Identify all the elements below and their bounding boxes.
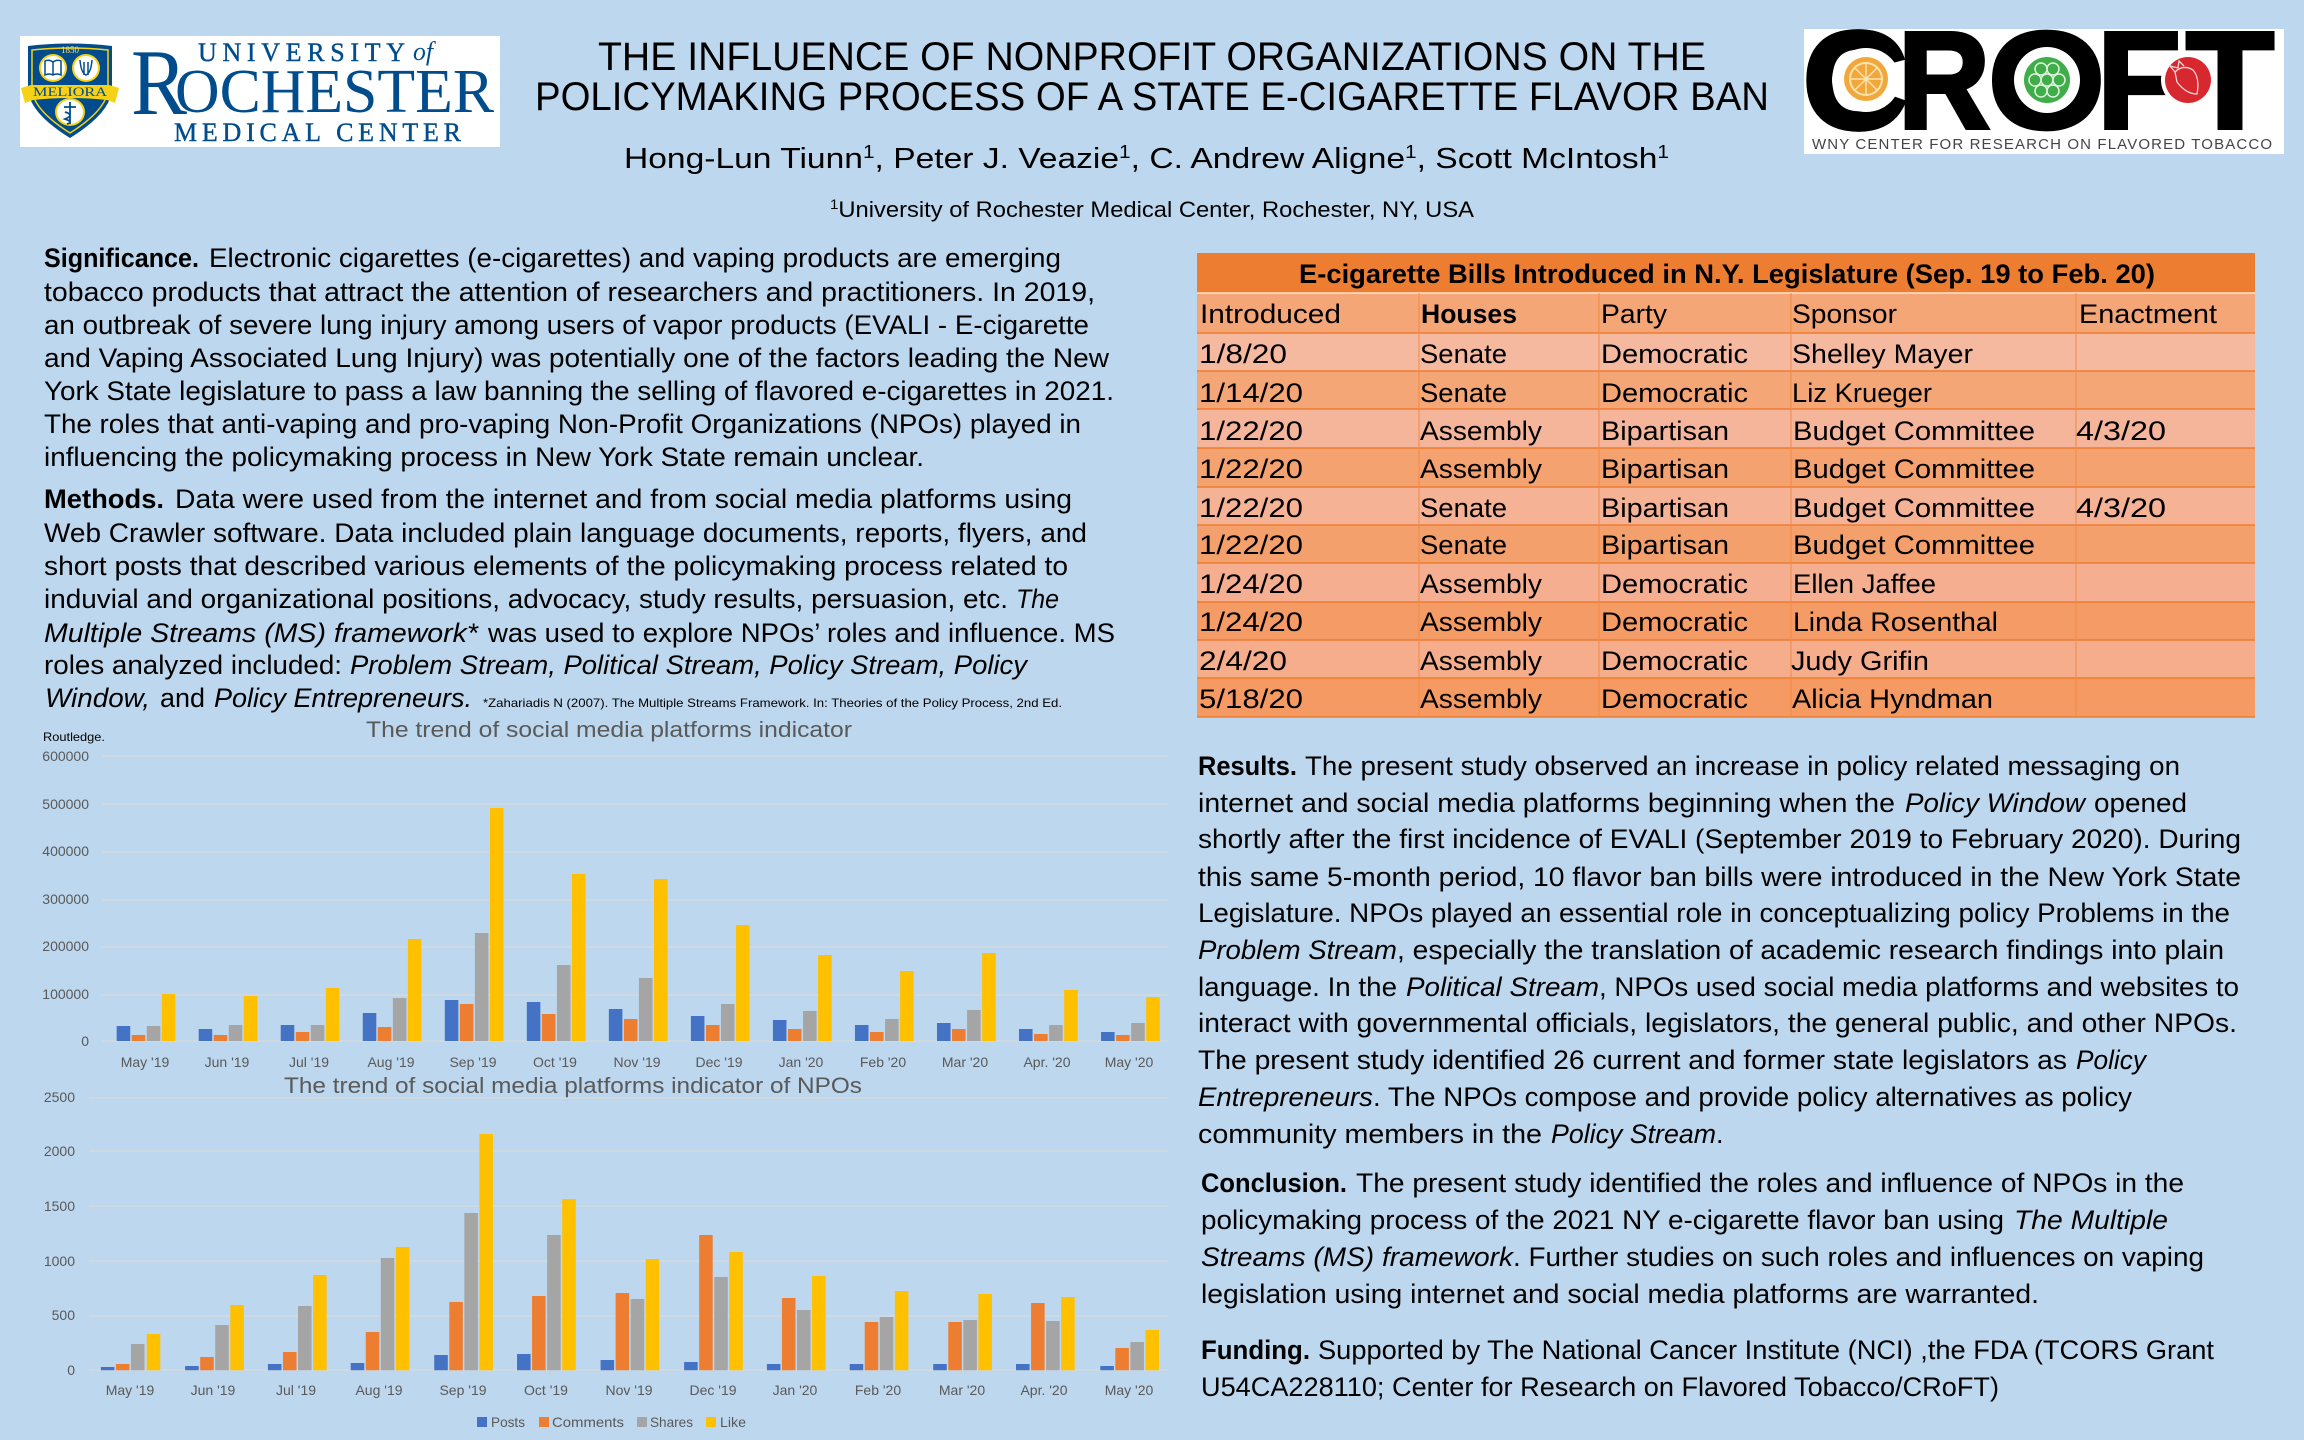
table header band	[1197, 253, 2255, 293]
authors: , Scott McIntosh	[1417, 143, 1657, 175]
table rows: Budget Committee	[1793, 416, 2035, 446]
text block: results: Entrepreneurs	[1198, 1082, 1373, 1112]
table rows: Democratic	[1601, 569, 1748, 599]
bars	[101, 1134, 1159, 1370]
icon: green grapes	[2014, 47, 2080, 113]
text block: conclusion: legislation using internet and social media platforms are warranted.	[1201, 1279, 2039, 1309]
y axis labels	[42, 748, 89, 1049]
x axis labels: Jul '19	[289, 1054, 329, 1070]
text block: funding: U54CA228110; Center for Research on Flavored Tobacco/CRoFT)	[1201, 1372, 1999, 1402]
text block: significance: Significance.	[44, 243, 199, 273]
text block: methods: Data were used from the internet and from social media platforms using	[175, 484, 1072, 514]
text block: conclusion: policymaking process of the 2021 NY e-cigarette flavor ban using	[1201, 1205, 2004, 1235]
x axis labels: Mar '20	[939, 1382, 985, 1398]
text block: conclusion: The present study identified the roles and influence of NPOs in the	[1356, 1168, 2184, 1198]
x axis labels: May '20	[1105, 1054, 1154, 1070]
x axis labels: Oct '19	[533, 1054, 577, 1070]
text block: results: internet and social media platforms beginning when the	[1198, 788, 1895, 818]
logo: University of Rochester Medical Center	[20, 31, 500, 147]
table rows: Assembly	[1420, 569, 1543, 599]
table rows: Bipartisan	[1601, 416, 1729, 446]
x axis labels: Jan '20	[779, 1054, 824, 1070]
text block: results: this same 5-month period, 10 flavor ban bills were introduced in the New York State	[1198, 862, 2241, 892]
text block: results: shortly after the first incidence of EVALI (September 2019 to February 2020). During	[1198, 824, 2241, 854]
logo letters: F	[2097, 4, 2181, 158]
text block: results: community members in the	[1198, 1119, 1542, 1149]
text block: results: opened	[2094, 788, 2187, 818]
x axis labels: Feb '20	[860, 1054, 906, 1070]
y axis labels: 1500	[44, 1198, 75, 1214]
authors: 1	[1657, 142, 1669, 162]
x axis labels: May '19	[106, 1382, 154, 1398]
logo letters: C	[1803, 4, 1907, 158]
table rows: Democratic	[1601, 339, 1748, 369]
column headers	[1200, 299, 2218, 329]
table rows: Assembly	[1420, 684, 1543, 714]
x axis labels: Apr. '20	[1020, 1382, 1068, 1398]
table rows: Senate	[1420, 339, 1507, 369]
text block: results: The present study observed an increase in policy related messaging on	[1305, 751, 2180, 781]
x axis labels	[121, 1054, 1154, 1070]
affiliation: University of Rochester Medical Center, Rochester, NY, USA	[838, 197, 1474, 222]
x axis labels: Oct '19	[524, 1382, 568, 1398]
x axis labels: Nov '19	[613, 1054, 661, 1070]
table rows	[1199, 339, 2166, 714]
footnote reference: *Zahariadis N (2007). The Multiple Streams Framework. In: Theories of the Policy Process, 2nd Ed.	[483, 696, 1062, 710]
authors: 1	[863, 142, 875, 162]
text block: results: Problem Stream	[1198, 935, 1397, 965]
text block: conclusion: Streams (MS) framework	[1201, 1242, 1515, 1272]
table: e-cigarette bills introduced	[1197, 253, 2255, 717]
text block: significance	[44, 243, 1114, 472]
table rows: Alicia Hyndman	[1792, 684, 1993, 714]
chart title: The trend of social media platforms indicator	[366, 717, 852, 742]
table rows: Bipartisan	[1601, 454, 1729, 484]
text block: results: Policy Window	[1905, 788, 2087, 818]
authors: 1	[1405, 142, 1417, 162]
y axis labels: 300000	[42, 891, 89, 907]
legend: Like	[720, 1414, 746, 1430]
table row fills	[1197, 293, 2255, 717]
y axis labels: 200000	[42, 938, 89, 954]
table title: E-cigarette Bills Introduced in N.Y. Legislature (Sep. 19 to Feb. 20)	[1299, 259, 2155, 289]
table rows: Budget Committee	[1793, 493, 2035, 523]
text block: significance: influencing the policymaking process in New York State remain unclear.	[44, 442, 924, 472]
icon: orange slice	[1832, 48, 1900, 112]
table rows: Democratic	[1601, 378, 1748, 408]
text block: conclusion: Conclusion.	[1201, 1168, 1347, 1198]
text block: funding: Funding.	[1201, 1335, 1310, 1365]
text block: results: language. In the	[1198, 972, 1397, 1002]
y axis labels	[44, 1089, 75, 1378]
table rows: Linda Rosenthal	[1793, 607, 1998, 637]
x axis labels: Dec '19	[689, 1382, 737, 1398]
bar chart: trend of social media platforms indicator	[42, 717, 1168, 1070]
legend	[477, 1414, 746, 1430]
logo text: University of: of	[413, 37, 437, 66]
x axis labels: Feb '20	[855, 1382, 901, 1398]
table rows: Budget Committee	[1793, 454, 2035, 484]
table rows: Shelley Mayer	[1792, 339, 1973, 369]
text block: results: Results.	[1198, 751, 1297, 781]
logo letters: O	[1988, 4, 2105, 158]
title	[535, 35, 1769, 119]
table rows: 1/22/20	[1199, 416, 1303, 446]
table rows: Assembly	[1420, 607, 1543, 637]
text block: results: Policy	[2076, 1045, 2147, 1075]
legend: Comments	[552, 1414, 624, 1430]
x axis labels: Aug '19	[367, 1054, 415, 1070]
text block: methods: Methods.	[44, 484, 164, 514]
x axis labels: Jun '19	[191, 1382, 236, 1398]
table rows: 1/24/20	[1199, 607, 1303, 637]
text block: results: The present study identified 26 current and former state legislators as	[1198, 1045, 2067, 1075]
text block: results: Political Stream	[1406, 972, 1599, 1002]
x axis labels: Apr. '20	[1023, 1054, 1071, 1070]
text block: significance: tobacco products that attract the attention of researchers and practitioners. In 2019,	[44, 277, 1095, 307]
legend: Shares	[650, 1414, 693, 1430]
logo text: Rochester: R	[131, 31, 187, 135]
text block: results: .	[1716, 1119, 1724, 1149]
y axis labels: 0	[81, 1033, 89, 1049]
icon: Meliora shield: MELIORA	[33, 84, 108, 99]
table rows: 4/3/20	[2076, 493, 2166, 523]
y axis labels: 2000	[44, 1143, 75, 1159]
table rows: 5/18/20	[1199, 684, 1303, 714]
table rows: Democratic	[1601, 684, 1748, 714]
x axis labels: May '19	[121, 1054, 170, 1070]
table rows: Assembly	[1420, 454, 1543, 484]
table rows: 4/3/20	[2076, 416, 2166, 446]
x axis labels: Nov '19	[605, 1382, 653, 1398]
text block: methods: induvial and organizational positions, advocacy, study results, persuasion, etc.	[44, 584, 1008, 614]
text block: significance: York State legislature to pass a law banning the selling of flavored e-cigarettes in 2021.	[44, 376, 1114, 406]
table rows: 1/22/20	[1199, 530, 1303, 560]
x axis labels: Mar '20	[942, 1054, 988, 1070]
y axis labels: 400000	[42, 843, 89, 859]
text block: significance: Electronic cigarettes (e-cigarettes) and vaping products are emerging	[209, 243, 1061, 273]
icon: red strawberry	[2161, 53, 2215, 107]
y axis labels: 100000	[42, 986, 89, 1002]
text block: significance: an outbreak of severe lung injury among users of vapor products (EVALI - E-cigarette	[44, 310, 1089, 340]
y axis labels: 0	[67, 1362, 75, 1378]
column headers: Enactment	[2079, 299, 2218, 329]
text block: results: . The NPOs compose and provide policy alternatives as policy	[1373, 1082, 2133, 1112]
table rows: 1/14/20	[1199, 378, 1303, 408]
x axis labels: Jun '19	[205, 1054, 250, 1070]
table rows: Assembly	[1420, 416, 1543, 446]
text block: results: , NPOs used social media platforms and websites to	[1599, 972, 2239, 1002]
x axis labels: Jul '19	[276, 1382, 316, 1398]
y axis labels: 500	[52, 1307, 75, 1323]
table rows: Ellen Jaffee	[1793, 569, 1936, 599]
table rows: Senate	[1420, 378, 1507, 408]
logo text: Medical Center: MEDICAL CENTER	[174, 118, 462, 147]
text block: methods: Problem Stream, Political Stream, Policy Stream, Policy	[350, 650, 1029, 680]
table rows: Judy Grifin	[1791, 646, 1929, 676]
logo: CRoFT	[1803, 4, 2284, 158]
table rows: Bipartisan	[1601, 530, 1729, 560]
y axis labels: 500000	[42, 796, 89, 812]
authors: , Peter J. Veazie	[875, 143, 1119, 175]
table rows: Budget Committee	[1793, 530, 2035, 560]
column headers: Sponsor	[1792, 299, 1897, 329]
text block: funding	[1201, 1335, 2214, 1402]
text block: methods: Window,	[45, 683, 150, 713]
logo letters: T	[2186, 4, 2274, 158]
text block: conclusion	[1201, 1168, 2204, 1309]
logo text: University of: UNIVERSITY	[198, 38, 405, 67]
text block: methods: Policy Entrepreneurs.	[214, 683, 472, 713]
y axis labels: 1000	[44, 1253, 75, 1269]
text block: methods: Web Crawler software. Data included plain language documents, reports, flyers, and	[44, 518, 1087, 548]
text block: methods: and	[160, 683, 205, 713]
column headers: Introduced	[1200, 299, 1341, 329]
x axis labels: Jan '20	[773, 1382, 818, 1398]
logo text: Rochester	[131, 31, 495, 135]
text block: funding: Supported by The National Cancer Institute (NCI) ,the FDA (TCORS Grant	[1318, 1335, 2214, 1365]
logo letters: R	[1898, 4, 1990, 158]
bar chart: trend of social media platforms indicator of NPOs	[44, 1073, 1168, 1430]
logo tagline: WNY CENTER FOR RESEARCH ON FLAVORED TOBACCO	[1812, 136, 2272, 153]
logo text: Rochester: OCHESTER	[175, 58, 495, 126]
x axis labels: Sep '19	[449, 1054, 497, 1070]
text block: methods: was used to explore NPOs’ roles and influence. MS	[487, 618, 1115, 648]
x axis labels	[106, 1382, 1154, 1398]
table rows: Bipartisan	[1601, 493, 1729, 523]
table rows: 2/4/20	[1199, 646, 1287, 676]
table rows: 1/22/20	[1199, 454, 1303, 484]
y axis labels: 2500	[44, 1089, 75, 1105]
table rows: 1/24/20	[1199, 569, 1303, 599]
authors: Hong-Lun Tiunn	[624, 143, 830, 175]
text block: significance: and Vaping Associated Lung Injury) was potentially one of the factors leading the New	[44, 343, 1110, 373]
text block: conclusion: . Further studies on such roles and influences on vaping	[1513, 1242, 2204, 1272]
icon: Meliora shield	[21, 44, 119, 138]
text block: conclusion: The Multiple	[2014, 1205, 2168, 1235]
authors: 1	[1119, 142, 1131, 162]
x axis labels: Aug '19	[355, 1382, 403, 1398]
title: POLICYMAKING PROCESS OF A STATE E-CIGARETTE FLAVOR BAN	[535, 75, 1769, 119]
table rows: Democratic	[1601, 607, 1748, 637]
footnote reference: Routledge.	[43, 730, 105, 744]
table rows: 1/8/20	[1199, 339, 1287, 369]
text block: results: interact with governmental officials, legislators, the general public, and other NPOs.	[1198, 1008, 2237, 1038]
text block: significance: The roles that anti-vaping and pro-vaping Non-Profit Organizations (NPOs) played in	[44, 409, 1081, 439]
table rows: Democratic	[1601, 646, 1748, 676]
affiliation: 1	[830, 196, 839, 212]
logo letters	[1803, 4, 2274, 158]
text block: methods	[44, 484, 1115, 713]
text block: results: , especially the translation of academic research findings into plain	[1397, 935, 2224, 965]
x axis labels: May '20	[1105, 1382, 1154, 1398]
table rows: Assembly	[1420, 646, 1543, 676]
column headers: Houses	[1421, 299, 1517, 329]
footnote reference	[43, 696, 1062, 744]
table rows: Liz Krueger	[1792, 378, 1932, 408]
text block: methods: roles analyzed included:	[44, 650, 342, 680]
text block: methods: The	[1016, 584, 1059, 614]
text block: methods: short posts that described various elements of the policymaking process related to	[44, 551, 1068, 581]
y axis labels: 600000	[42, 748, 89, 764]
table rows: Senate	[1420, 530, 1507, 560]
x axis labels: Sep '19	[439, 1382, 487, 1398]
table rows: Senate	[1420, 493, 1507, 523]
text block: results: Policy Stream	[1551, 1119, 1716, 1149]
legend: Posts	[491, 1414, 525, 1430]
chart title: The trend of social media platforms indicator of NPOs	[284, 1073, 862, 1098]
text block: methods: Multiple Streams (MS) framework*	[44, 618, 480, 648]
icon: Meliora shield: 1850	[61, 45, 80, 55]
x axis labels: Dec '19	[695, 1054, 743, 1070]
title: THE INFLUENCE OF NONPROFIT ORGANIZATIONS ON THE	[598, 35, 1706, 79]
authors: , C. Andrew Aligne	[1131, 143, 1405, 175]
text block: results: Legislature. NPOs played an essential role in conceptualizing policy Problems in the	[1198, 898, 2230, 928]
column headers: Party	[1601, 299, 1668, 329]
table rows: 1/22/20	[1199, 493, 1303, 523]
text block: results	[1198, 751, 2241, 1149]
bars	[117, 808, 1160, 1041]
